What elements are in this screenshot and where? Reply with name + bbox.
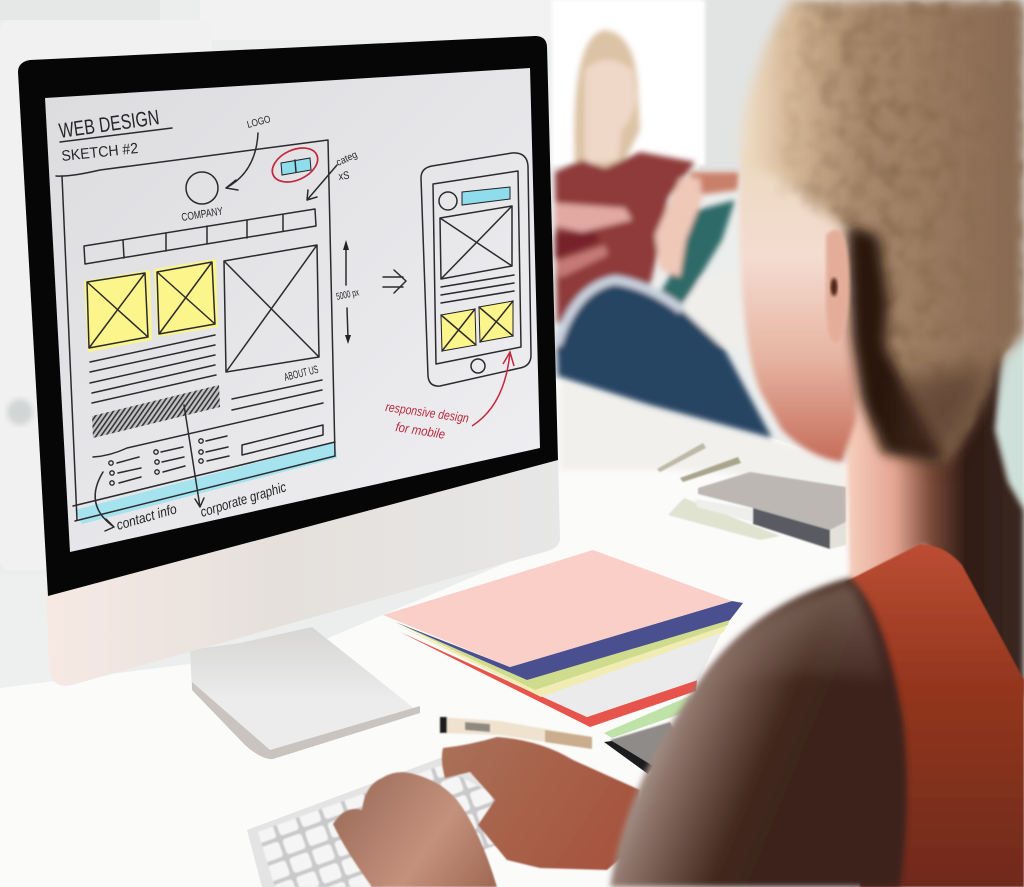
dark hair behind ear and at nape: [848, 225, 945, 462]
sketch: corporate graphic annotation: corporate graphic: [198, 479, 288, 520]
teal chair behind designer: [995, 335, 1024, 510]
cream sheet: [395, 622, 728, 697]
sketch: arrow from desktop to mobile: [383, 270, 406, 293]
orange-red sleeveless top: [845, 544, 1024, 887]
sketch: responsive design note in red: for mobile: [395, 419, 446, 442]
blue sheet: [395, 601, 743, 680]
blurred colleague in background: [555, 30, 772, 438]
keyboard: [247, 757, 556, 887]
shoulder highlight: [710, 582, 885, 680]
hair texture: [780, 0, 1024, 453]
tablet and black pen: [604, 722, 680, 774]
notebook on desk: [668, 472, 846, 549]
foreground designer: [610, 0, 1024, 887]
right hand: [442, 737, 640, 870]
sketch: text lines: [90, 335, 216, 403]
sketch: responsive design note in red: responsive design: [385, 399, 470, 426]
cropped tan hair: [742, 0, 1024, 463]
sketch: hatched banner: [92, 385, 220, 438]
sketch: contact info annotation: [95, 472, 179, 533]
sketch: responsive design note in red: [385, 352, 514, 442]
sketch: yellow image placeholders: [84, 259, 218, 352]
yellow-green sheet: [395, 614, 732, 690]
silver chin: [46, 455, 560, 686]
sketch: mobile phone wireframe: [421, 153, 531, 386]
sketch: category element circled in red: xS: [338, 170, 350, 183]
bare shoulder and arm: [610, 578, 907, 887]
stack of coloured papers: [383, 550, 743, 738]
sketch: logo circle and company label: [181, 114, 272, 224]
sketch: large image placeholder: [224, 245, 319, 372]
sketch: about us block: [93, 364, 323, 457]
monitor: [18, 36, 560, 686]
sketch: corporate graphic annotation: [184, 405, 288, 520]
face in profile: [739, 130, 856, 462]
pens on desk: [657, 443, 741, 482]
red sheet: [400, 632, 697, 727]
left hand: [333, 772, 497, 887]
monitor stand: [190, 627, 420, 759]
sketch: logo circle and company label: COMPANY: [181, 205, 224, 224]
screen: [45, 68, 540, 552]
marker pen: [440, 717, 592, 749]
sketch: heading: [57, 106, 172, 165]
sketch: about us block: ABOUT US: [283, 364, 320, 384]
sketch: height dimension arrow: [335, 240, 360, 344]
sketch: website wireframe frame: [56, 140, 337, 524]
sketch: navigation bar: [84, 209, 316, 264]
white desk: [0, 378, 850, 887]
ear: [826, 230, 849, 343]
sketch: height dimension arrow: 5000 px: [335, 287, 360, 303]
hands on keyboard: [333, 737, 640, 887]
sketch: category element circled in red: categ: [335, 149, 359, 169]
sketch: heading: WEB DESIGN: [57, 106, 161, 143]
sketch: heading: SKETCH #2: [61, 140, 139, 165]
sketch: contact info annotation: contact info: [114, 500, 179, 533]
black bezel: [18, 36, 558, 596]
sketch: bullet lists: [109, 436, 229, 485]
neck and back: [843, 330, 1024, 700]
pink top sheet: [383, 550, 732, 667]
sketch: logo circle and company label: LOGO: [246, 114, 272, 131]
sketch: category element circled in red: [267, 141, 359, 200]
pale grey sheet: [447, 632, 722, 717]
green sheet: [604, 695, 692, 738]
